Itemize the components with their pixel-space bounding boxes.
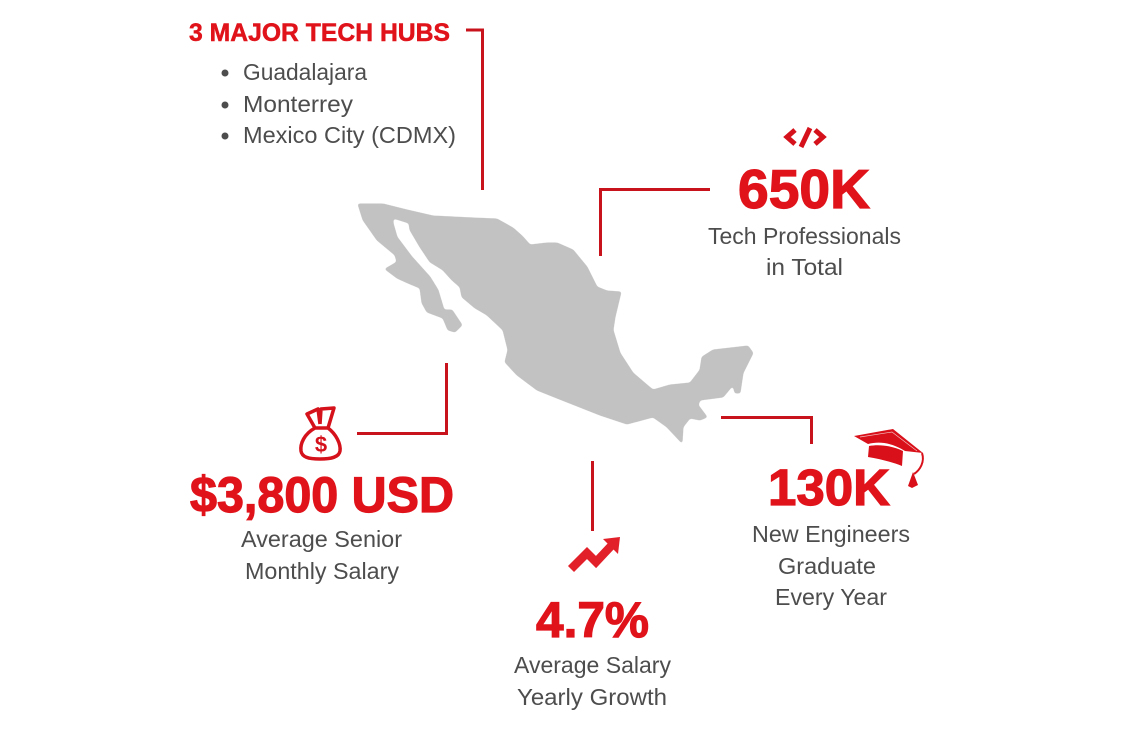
heading: tech hubs: 3 MAJOR TECH HUBS [189, 19, 450, 47]
label: senior salary: Monthly Salary [245, 558, 399, 584]
list of hubs: Monterrey [243, 91, 354, 117]
label: senior salary: Average Senior [241, 526, 402, 552]
block: tech hubs [189, 19, 456, 148]
label: tech professionals: Tech Professionals [708, 223, 901, 249]
block: tech professionals [708, 128, 901, 280]
connector: tech professionals [600, 190, 710, 256]
icon: growth arrow [571, 537, 620, 569]
label: new engineers [752, 521, 910, 610]
connector: salary [357, 363, 446, 434]
label: new engineers: New Engineers [752, 521, 910, 547]
list of hubs [222, 59, 456, 148]
label: tech professionals: in Total [766, 254, 843, 280]
label: senior salary [241, 526, 402, 584]
label: salary growth: Average Salary [514, 652, 671, 678]
connector: growth [591, 461, 594, 531]
label: salary growth [514, 652, 671, 710]
icon: graduation cap [854, 429, 923, 488]
map of Mexico [358, 204, 753, 443]
label: new engineers: Every Year [775, 584, 887, 610]
list of hubs: Guadalajara [243, 59, 367, 85]
icon: money bag: $ [315, 432, 327, 457]
icon: money bag [301, 408, 340, 459]
connector: tech hubs [466, 30, 482, 190]
stat: $3,800 USD: $3,800 USD [190, 467, 454, 523]
list of hubs: Mexico City (CDMX) [243, 122, 456, 148]
label: new engineers: Graduate [778, 553, 876, 579]
label: salary growth: Yearly Growth [517, 684, 667, 710]
label: tech professionals [708, 223, 901, 280]
icon: code brackets [787, 128, 823, 147]
stat: 130K: 130K [768, 459, 890, 516]
block: salary growth [514, 537, 671, 710]
stat: 650K: 650K [738, 158, 870, 220]
stat: 4.7%: 4.7% [536, 592, 649, 648]
connector: graduates [721, 418, 812, 444]
block: new engineers [752, 429, 923, 610]
block: senior salary [190, 408, 454, 584]
